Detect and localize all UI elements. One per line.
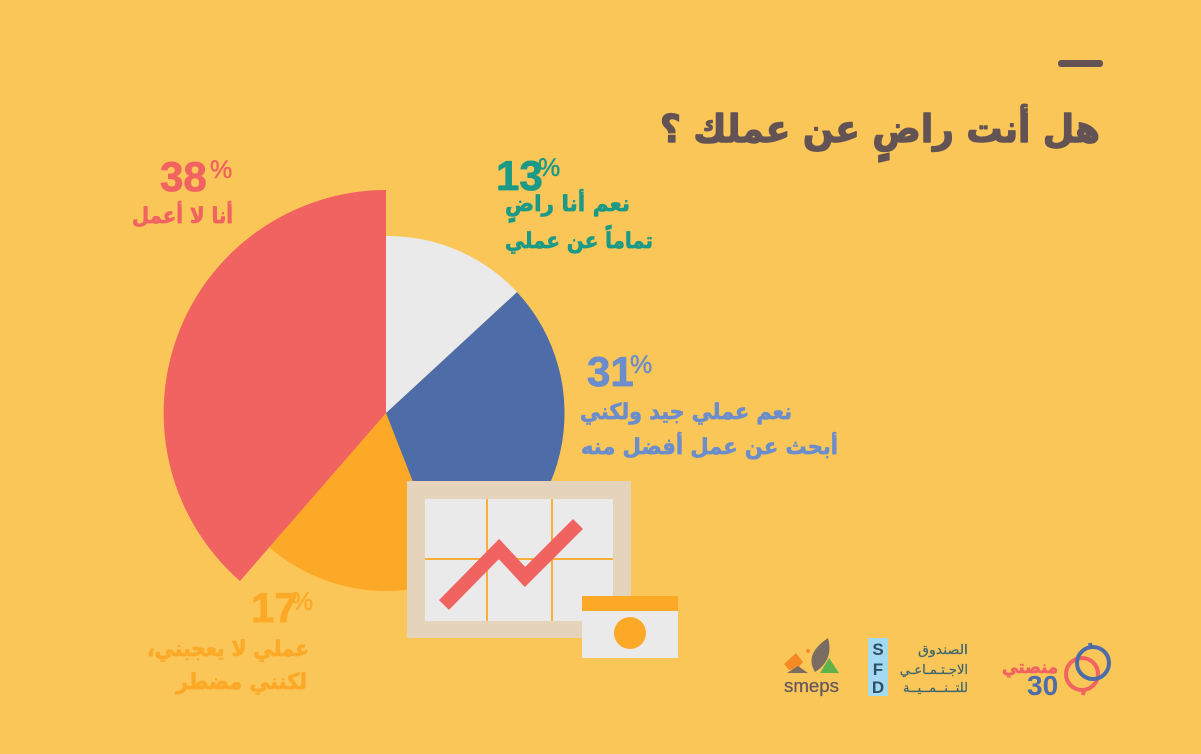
label: 13%: 13 [496,152,543,199]
logo: SFD [868,638,968,697]
label: 31%: 31 [587,348,634,395]
slice: 38% [164,190,386,581]
logo: SFD: F [873,660,883,679]
logo: SFD: D [872,678,884,697]
label: 38% [132,153,233,229]
logo: minasati 30: 30 [1027,670,1058,701]
logo: SFD: S [872,640,884,659]
label: 13%: تماماً عن عملي [505,224,653,254]
label: 31% [580,348,838,460]
label: 38%: 38 [160,153,207,200]
label: 31%: أبحث عن عمل أفضل منه [581,431,838,460]
logo: SFD: الصندوق [918,643,968,658]
logo: SFD: الاجـتـمـاعـي [900,663,968,678]
label: 17%: 17 [251,584,298,631]
label: 17%: لكنني مضطر [175,670,307,695]
slice: 31% [386,292,565,579]
logo: SFD: للتــنــمــيــة [903,681,968,696]
slice: 13% [386,236,517,413]
label: 13% [496,152,653,254]
icon: chart board [407,481,631,638]
label: 38%: % [210,156,232,184]
logo: minasati 30 [1002,643,1109,701]
slice: 17% [250,405,470,591]
label: 31%: نعم عملي جيد ولكني [580,400,792,425]
pie chart [164,190,565,591]
icon: card [582,596,678,658]
label: 13%: % [538,154,560,182]
label: 17%: % [291,588,313,616]
label: 17% [147,584,313,695]
label: 38%: أنا لا أعمل [132,200,233,229]
title: هل أنت راضٍ عن عملك ؟ [660,104,1100,163]
logo: smeps [784,638,839,696]
header accent bar [1058,60,1103,67]
label: 13%: نعم أنا راضٍ [505,188,630,223]
logo: minasati 30: منصتي [1002,657,1058,678]
label: 17%: عملي لا يعجبني، [147,637,309,662]
logo: smeps: smeps [784,676,839,696]
label: 31%: % [630,351,652,379]
